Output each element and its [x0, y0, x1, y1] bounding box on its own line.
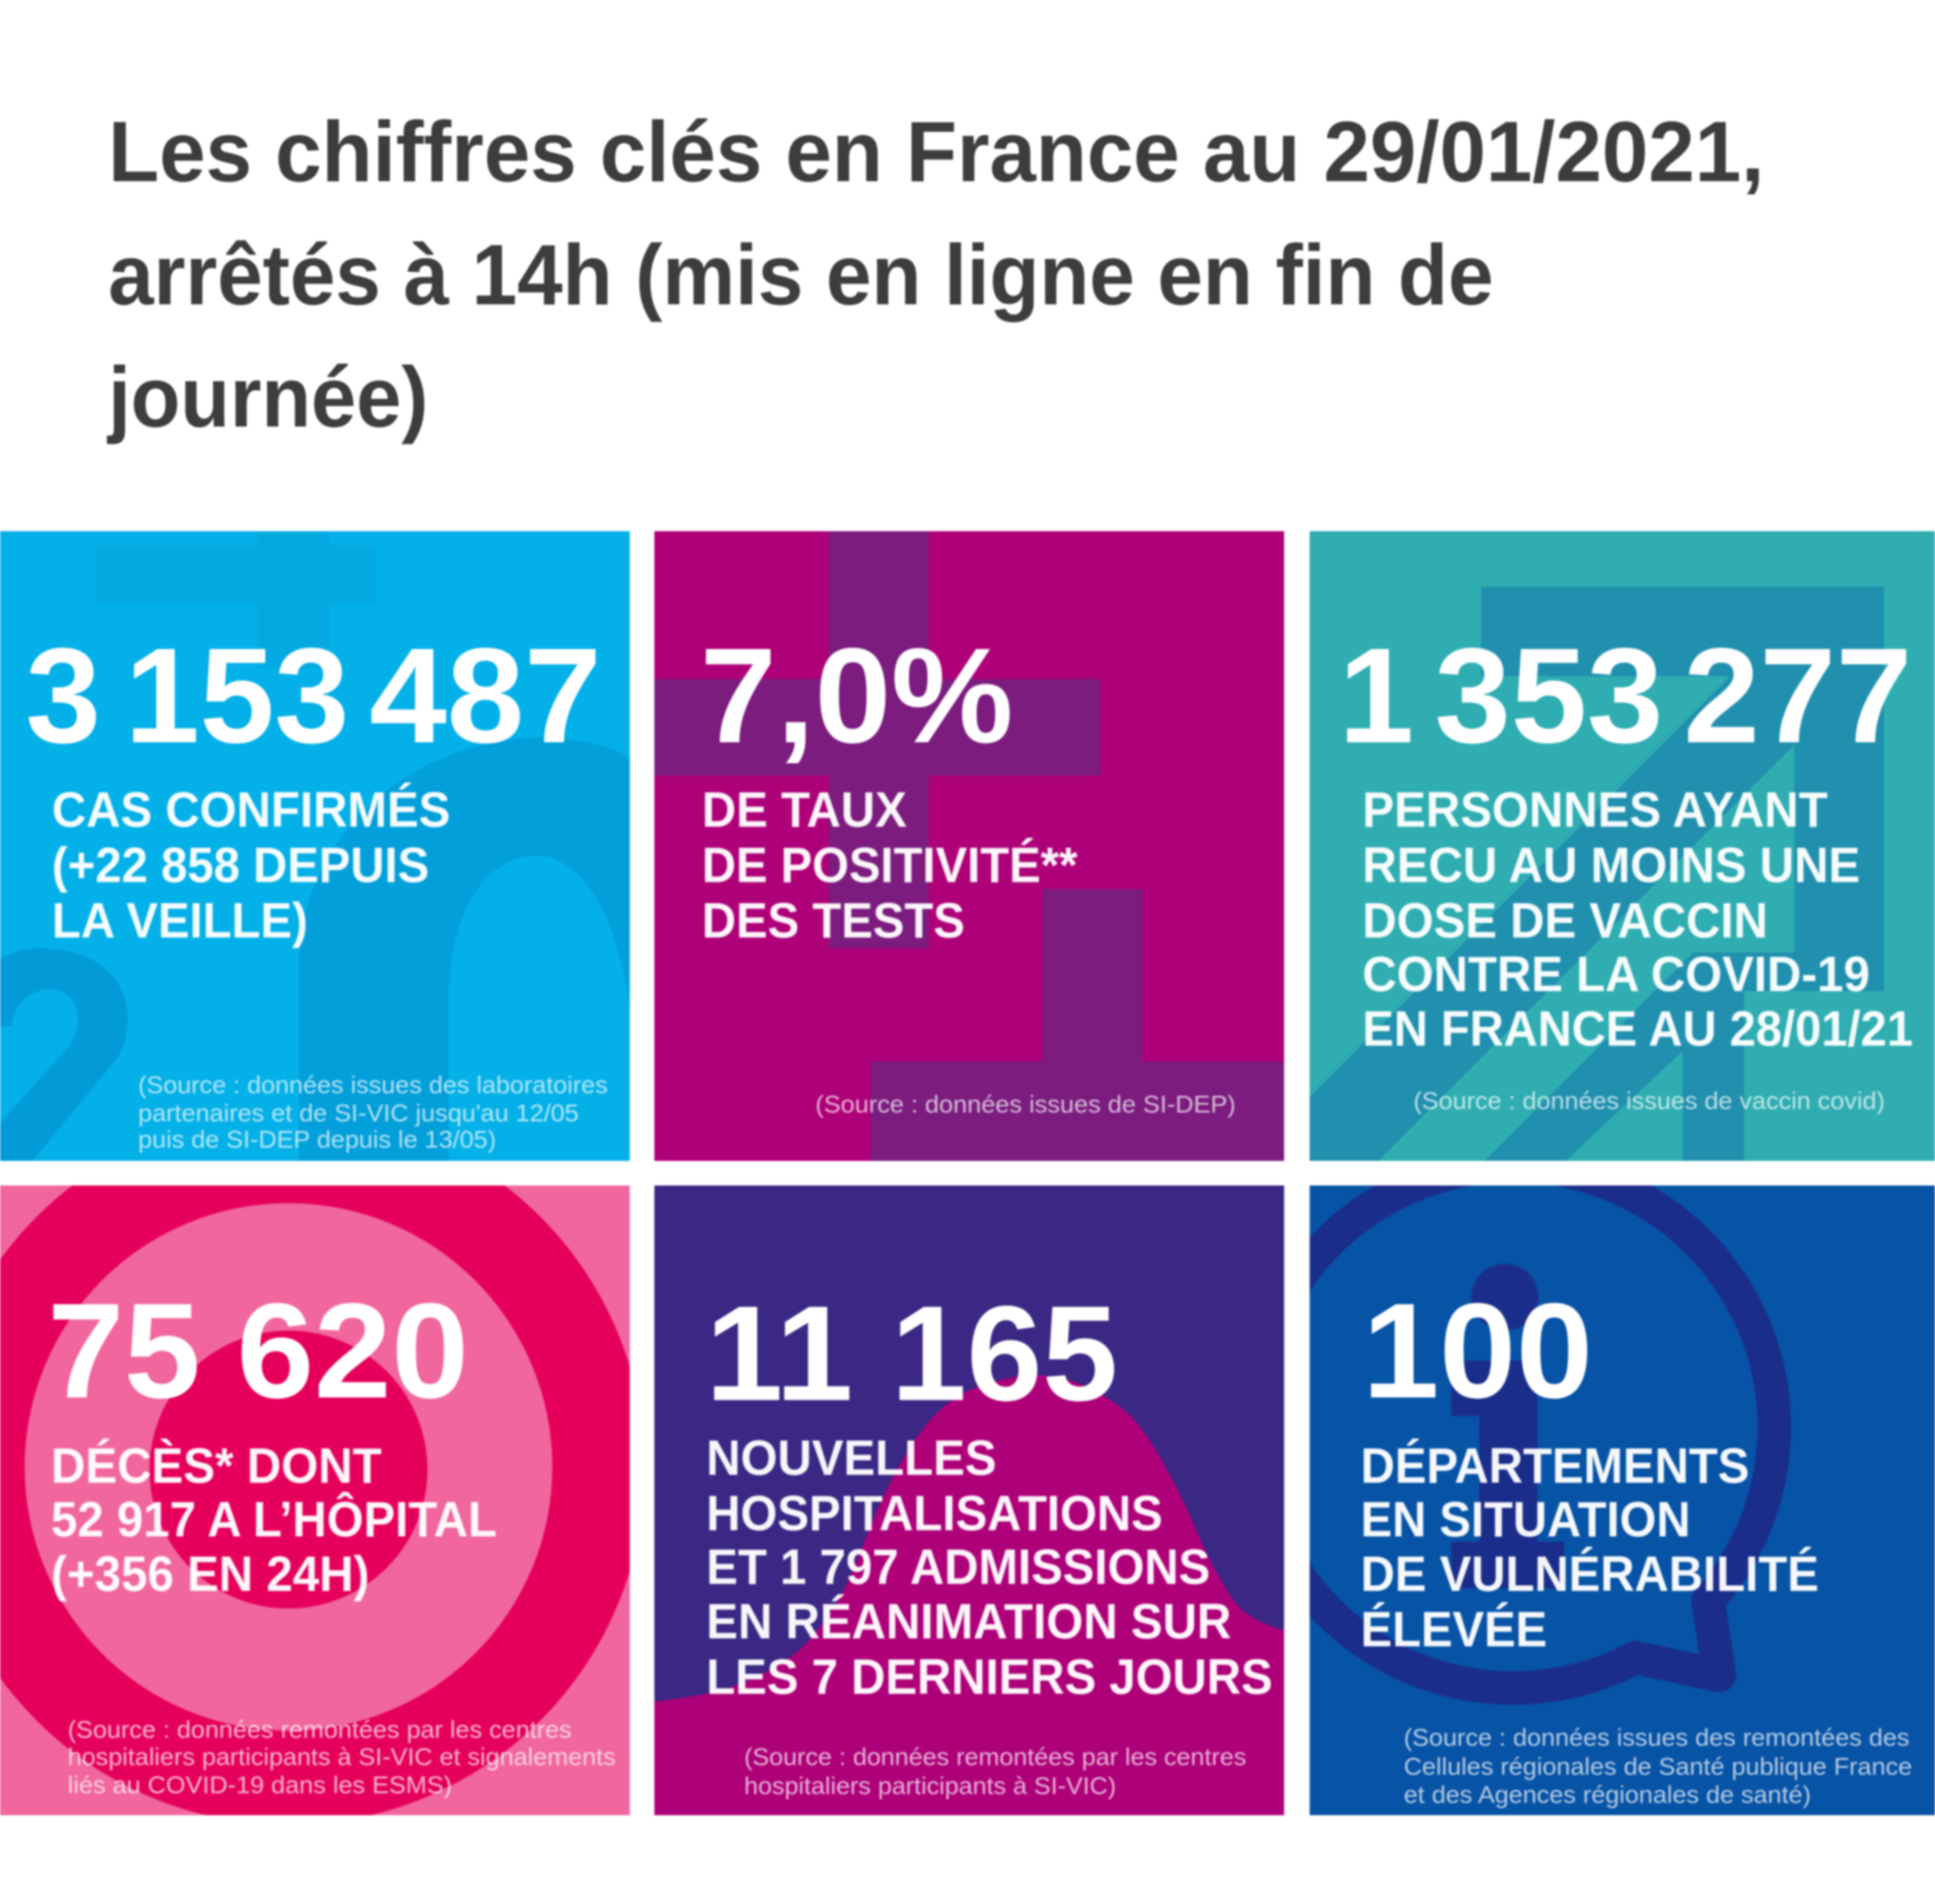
label: EN RÉANIMATION SUR	[706, 1594, 1231, 1650]
title: arrêtés à 14h (mis en ligne en fin de	[108, 227, 1493, 323]
source: partenaires et de SI-VIC jusqu'au 12/05	[138, 1099, 579, 1127]
label: 52 917 A L’HÔPITAL	[51, 1491, 497, 1548]
source: (Source : données issues de SI-DEP)	[815, 1091, 1236, 1118]
label: CONTRE LA COVID-19	[1362, 946, 1870, 1003]
label: DE POSITIVITÉ**	[702, 837, 1078, 894]
big number: 1	[1339, 620, 1414, 771]
big number: 353	[1435, 620, 1663, 771]
source: (Source : données issues des laboratoires	[138, 1071, 608, 1098]
big number	[26, 620, 602, 771]
source: (Source : données issues des remontées des	[1404, 1724, 1909, 1751]
big number	[705, 1278, 1118, 1429]
background target circles	[0, 1184, 632, 1817]
panel: hospitalisations	[654, 1185, 1284, 1815]
title: Les chiffres clés en France au 29/01/2021,	[108, 104, 1764, 200]
label: DE VULNÉRABILITÉ	[1361, 1546, 1819, 1602]
title: journée)	[106, 349, 428, 445]
big number: 620	[237, 1275, 469, 1426]
label: ÉLEVÉE	[1361, 1601, 1547, 1658]
label: LA VEILLE)	[52, 893, 308, 949]
label: DOSE DE VACCIN	[1362, 893, 1768, 949]
big number	[1339, 620, 1912, 771]
label: PERSONNES AYANT	[1362, 782, 1828, 838]
panel: décès	[0, 1184, 632, 1817]
source: hospitaliers participants à SI-VIC)	[744, 1772, 1116, 1799]
panel: vaccination	[1310, 531, 1935, 1161]
label: (+356 EN 24H)	[51, 1546, 369, 1602]
label	[706, 1430, 1273, 1705]
source	[1404, 1724, 1912, 1808]
big number: 277	[1683, 620, 1912, 771]
panel: vulnérabilité	[1308, 1184, 1935, 1817]
source	[138, 1071, 608, 1153]
source	[68, 1716, 616, 1798]
source: (Source : données issues de vaccin covid)	[1413, 1087, 1885, 1114]
source	[744, 1743, 1246, 1799]
big number: 11	[705, 1278, 853, 1429]
background digit 7	[1310, 587, 1884, 1161]
big number: 153	[125, 620, 349, 771]
big number: 75	[47, 1275, 201, 1426]
label	[51, 1438, 497, 1602]
label: EN FRANCE AU 28/01/21	[1362, 1001, 1913, 1057]
label: (+22 858 DEPUIS	[52, 837, 429, 894]
label	[702, 782, 1078, 949]
label	[1362, 782, 1913, 1057]
label: RECU AU MOINS UNE	[1362, 837, 1860, 894]
background epidemic curve	[654, 1375, 1284, 1815]
big number: 165	[891, 1278, 1118, 1429]
source: liés au COVID-19 dans les ESMS)	[68, 1771, 452, 1798]
background digits 2 and 0	[0, 738, 630, 1161]
title	[106, 104, 1764, 445]
label: DÉCÈS* DONT	[51, 1438, 382, 1494]
source: puis de SI-DEP depuis le 13/05)	[138, 1126, 496, 1153]
source: hospitaliers participants à SI-VIC et signalements	[68, 1743, 616, 1770]
label: CAS CONFIRMÉS	[52, 782, 450, 838]
label: DES TESTS	[702, 893, 965, 949]
label	[52, 782, 450, 949]
panel: taux de positivité	[654, 531, 1284, 1161]
big number: 7,0%	[700, 620, 1013, 771]
label: ET 1 797 ADMISSIONS	[706, 1539, 1210, 1595]
big number: 487	[369, 620, 602, 771]
source: (Source : données remontées par les centres	[68, 1716, 572, 1743]
label: LES 7 DERNIERS JOURS	[706, 1649, 1273, 1705]
background plus shapes	[654, 531, 1284, 1161]
label	[1361, 1438, 1819, 1658]
icon: speech bubble with i	[1252, 1165, 1774, 1688]
label: EN SITUATION	[1361, 1492, 1690, 1548]
label: NOUVELLES	[706, 1430, 997, 1486]
source: Cellules régionales de Santé publique France	[1404, 1753, 1912, 1780]
label: DÉPARTEMENTS	[1361, 1438, 1749, 1494]
source: (Source : données remontées par les centres	[744, 1743, 1246, 1770]
label: DE TAUX	[702, 782, 907, 838]
big number: 100	[1362, 1275, 1593, 1426]
big number: 3	[26, 620, 101, 771]
big number	[47, 1275, 469, 1426]
label: HOSPITALISATIONS	[706, 1485, 1163, 1542]
source: et des Agences régionales de santé)	[1404, 1781, 1811, 1808]
panel: cas confirmés	[0, 531, 630, 1161]
